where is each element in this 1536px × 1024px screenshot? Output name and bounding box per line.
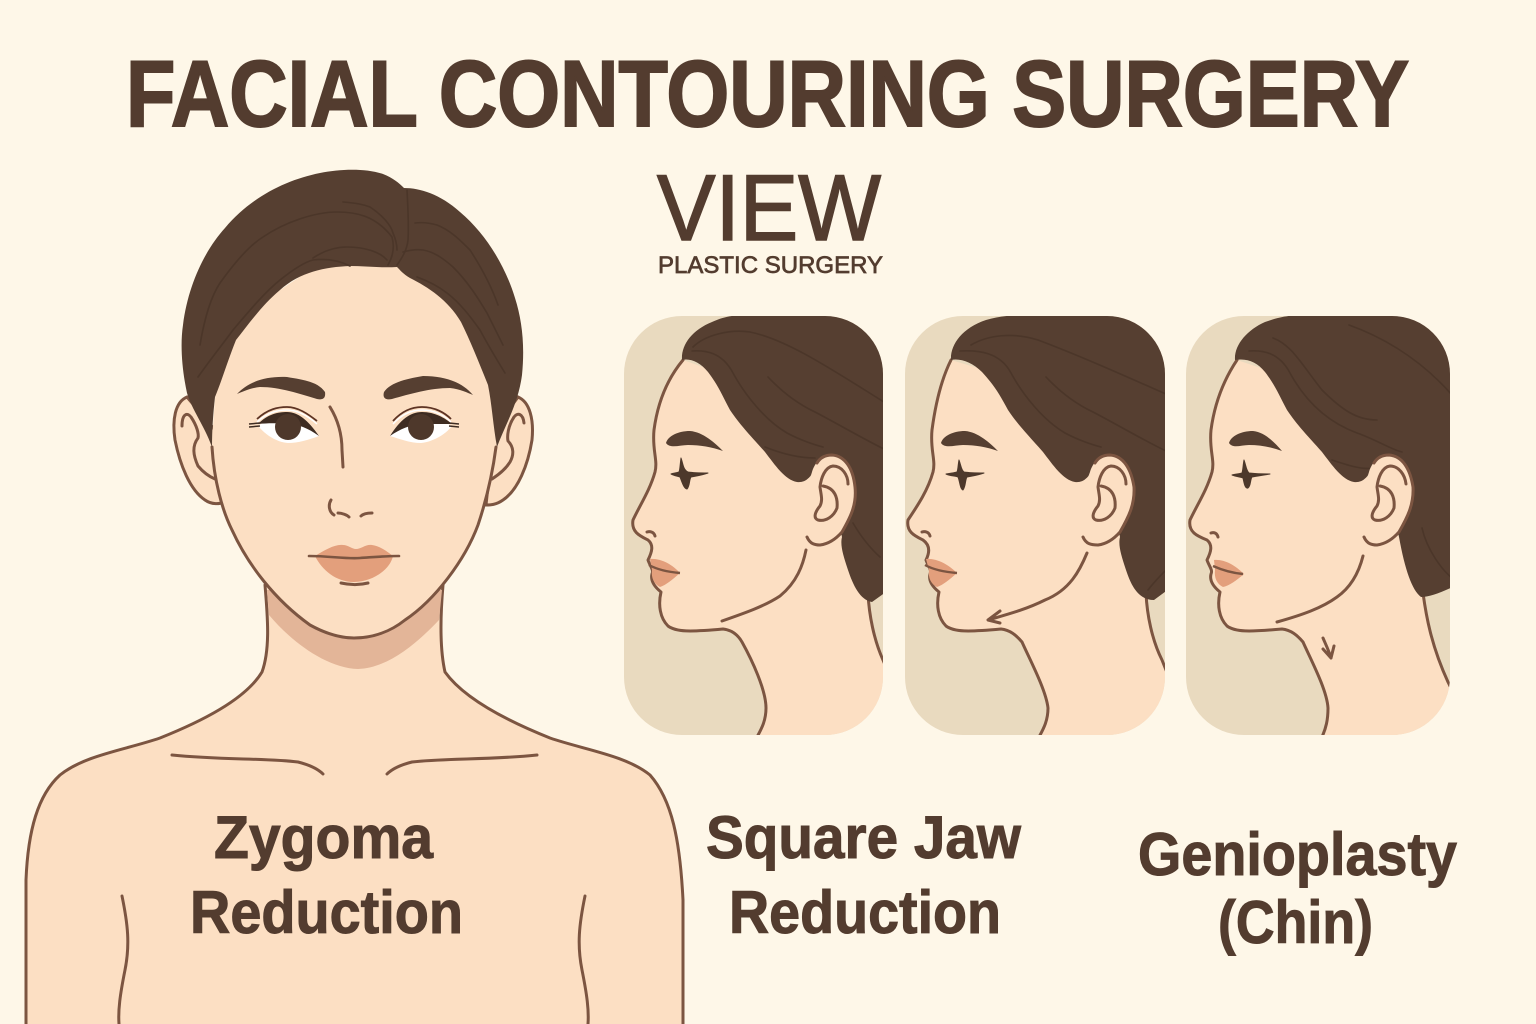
label: Genioplasty (Chin) <box>1138 821 1458 956</box>
label: Square Jaw Reduction <box>706 804 1021 946</box>
left eyebrow <box>237 377 325 399</box>
right eyebrow <box>384 376 473 399</box>
right ear <box>486 397 532 505</box>
left eye <box>249 407 319 443</box>
face <box>212 250 500 638</box>
label: Genioplasty (Chin): Genioplasty <box>1138 821 1458 888</box>
front view figure <box>26 170 683 1024</box>
underarm lines <box>119 896 588 1024</box>
label: Zygoma Reduction: Reduction <box>190 879 463 946</box>
label: Square Jaw Reduction: Square Jaw <box>706 804 1021 871</box>
panel: zygoma profile <box>624 316 883 735</box>
label: Genioplasty (Chin): (Chin) <box>1218 889 1373 956</box>
torso and neck <box>26 585 683 1024</box>
left ear <box>174 397 224 504</box>
right eye <box>390 407 459 443</box>
nose <box>329 407 372 517</box>
collarbones <box>172 755 537 774</box>
arrow: jaw reduction <box>988 553 1087 623</box>
arrow: chin <box>1323 638 1334 658</box>
hair <box>182 170 523 447</box>
logo: VIEW Plastic Surgery: PLASTIC SURGERY <box>658 252 883 279</box>
panel: genioplasty profile <box>1186 315 1467 737</box>
panel: square jaw profile <box>905 315 1188 737</box>
label: Zygoma Reduction <box>190 804 463 946</box>
label: Square Jaw Reduction: Reduction <box>729 879 1001 946</box>
logo: VIEW Plastic Surgery: VIEW <box>657 155 881 260</box>
lips <box>309 545 399 584</box>
ear inner lines <box>182 414 524 479</box>
label: Zygoma Reduction: Zygoma <box>214 804 434 871</box>
neck shadow <box>267 590 442 669</box>
